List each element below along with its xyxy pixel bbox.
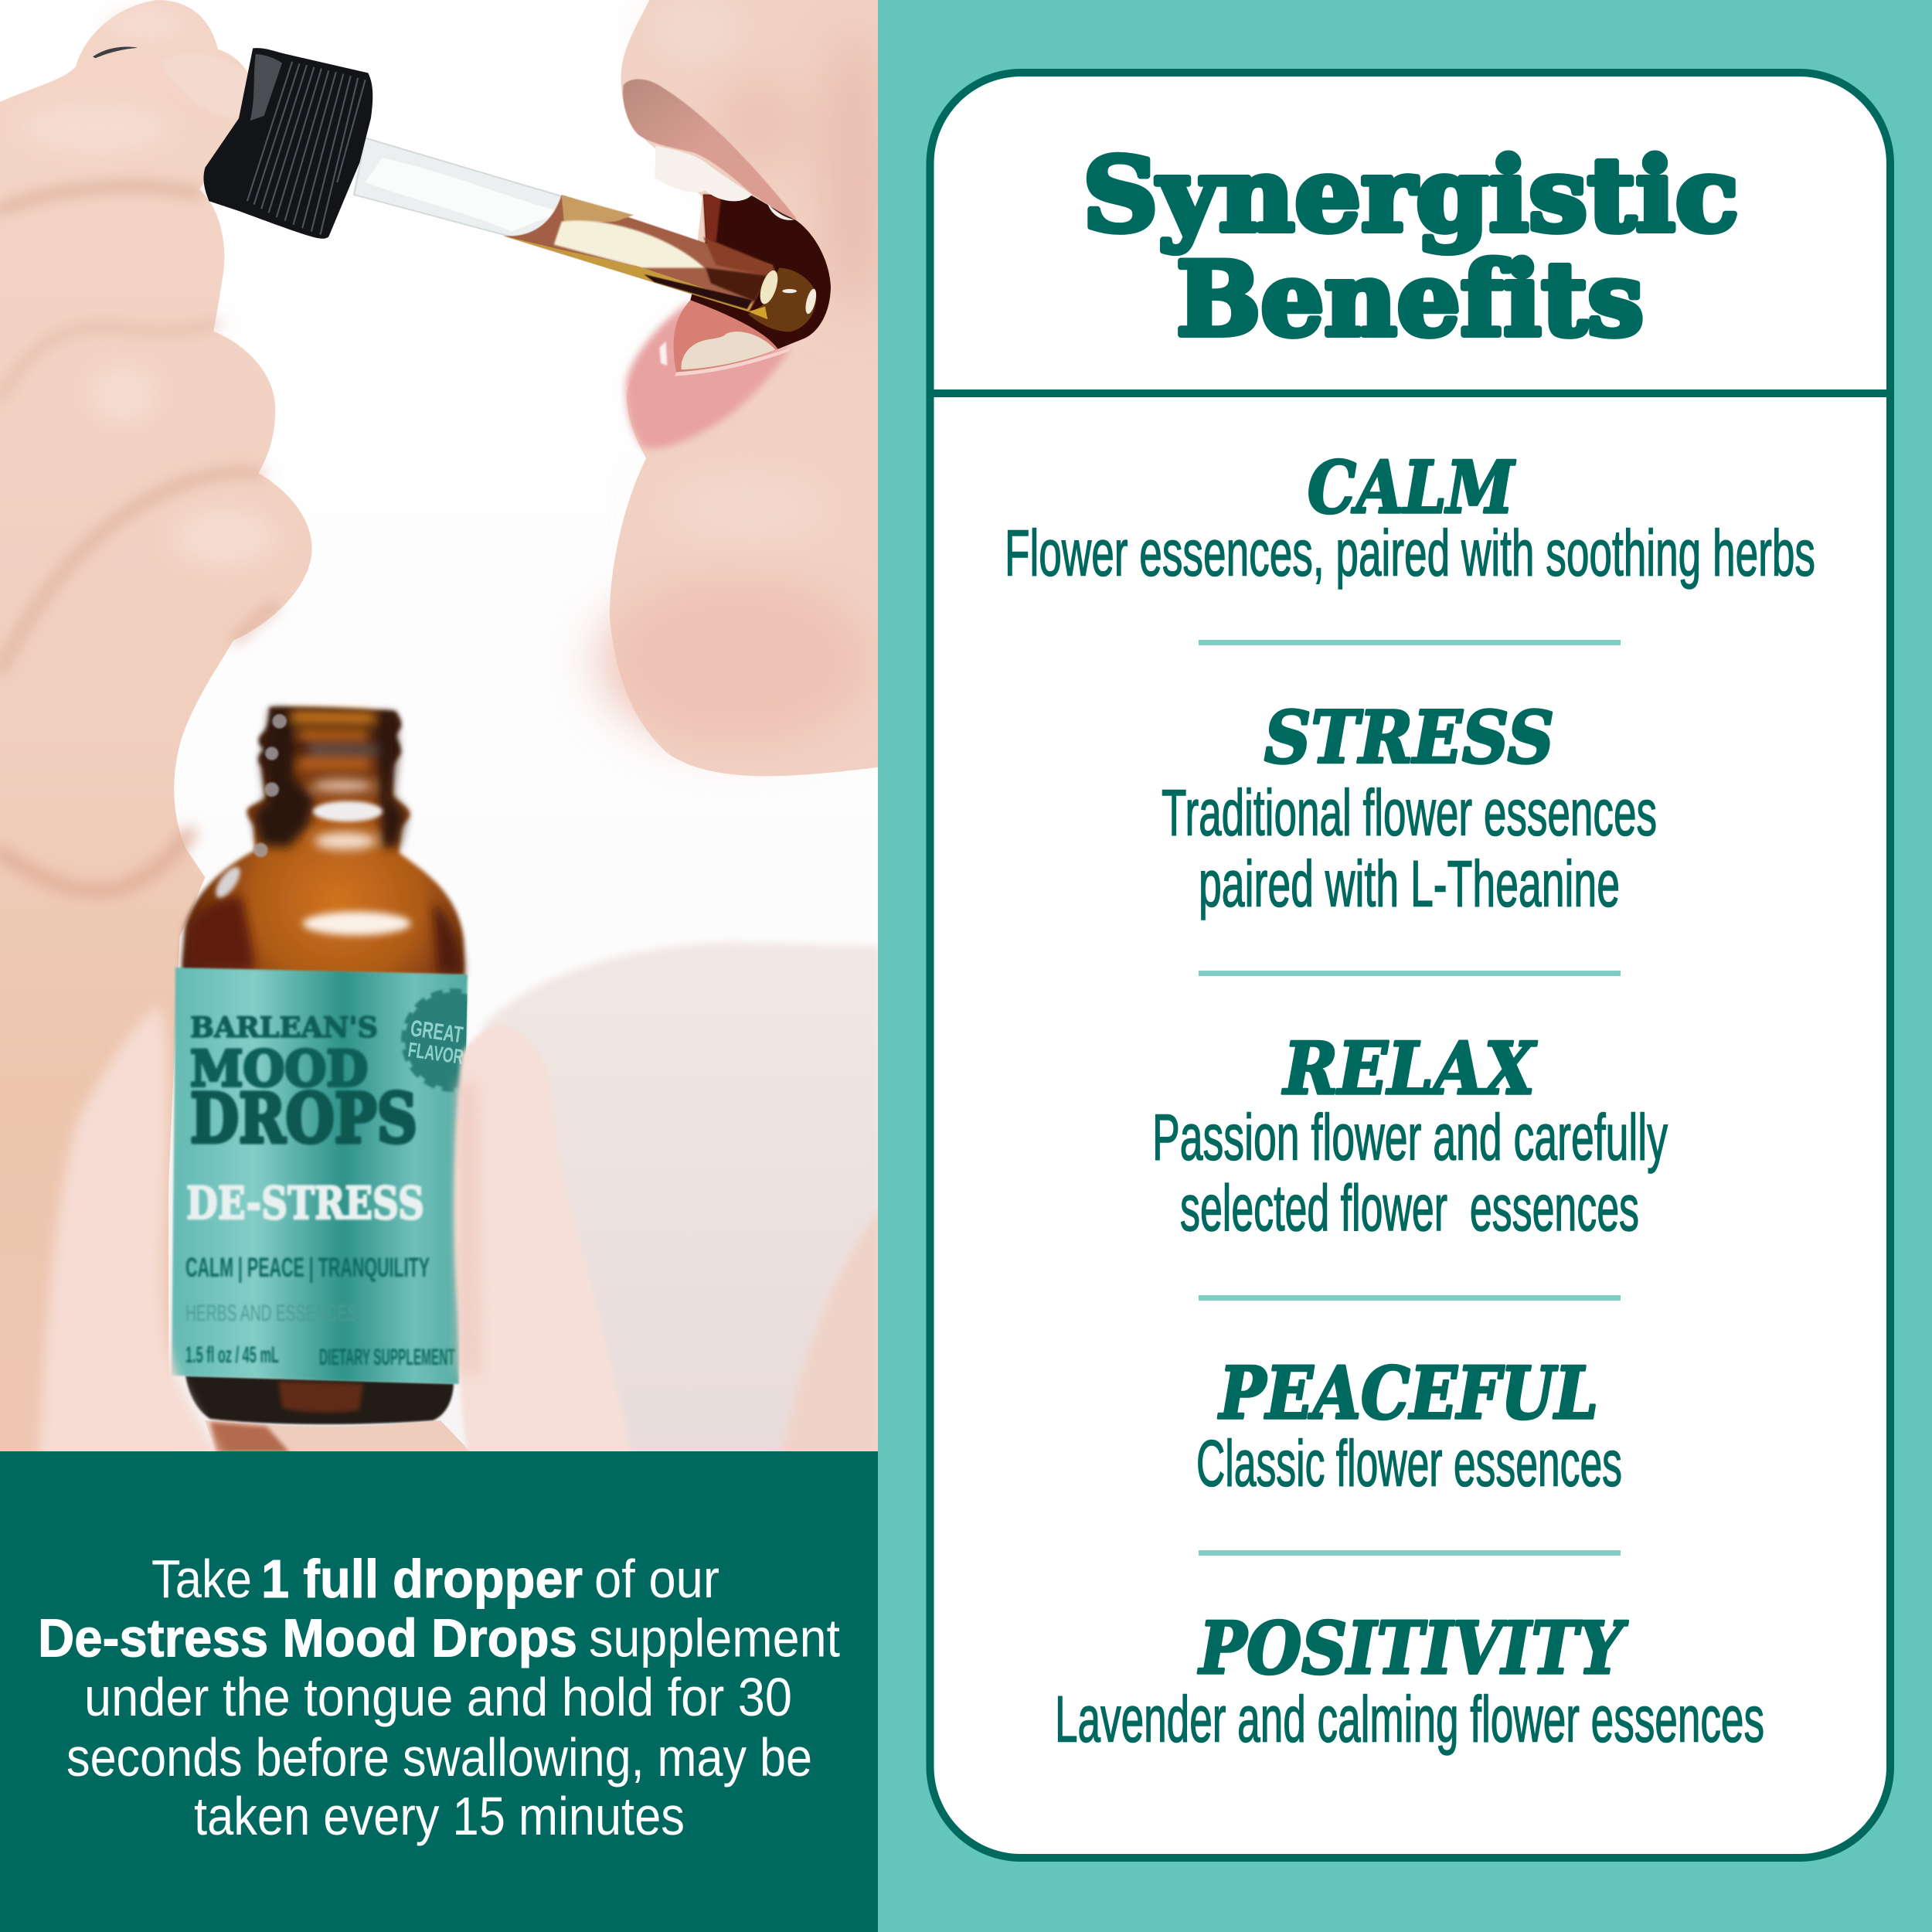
benefit: peaceful: Classic flower essences <box>1196 1427 1622 1499</box>
label text: MOOD <box>190 1040 368 1098</box>
benefit: stress: paired with L-Theanine <box>1199 847 1620 920</box>
instructions panel <box>0 1451 878 1932</box>
mouth details <box>623 79 831 448</box>
ribbed black cap <box>203 48 372 239</box>
benefit: positivity <box>1055 1606 1764 1756</box>
highlights on knuckles and nail <box>22 10 275 566</box>
instruction text: of our <box>594 1549 719 1609</box>
benefits card <box>930 73 1890 1858</box>
benefit: relax: RELAX <box>1281 1026 1537 1111</box>
lower teeth <box>681 332 775 369</box>
benefit: peaceful: PEACEFUL <box>1217 1351 1598 1435</box>
blurred shoulder <box>483 942 883 1459</box>
dropper pipette and cap <box>203 48 818 332</box>
upper teeth <box>655 145 752 201</box>
photo: person taking dropper of drops, hand holding bottle <box>0 0 885 1461</box>
instruction text: supplement <box>589 1607 840 1668</box>
base of bottle and gap below <box>185 1376 471 1453</box>
clear glass tube <box>354 138 596 257</box>
label text: CALM | PEACE | TRANQUILITY <box>185 1253 430 1283</box>
label text: DROPS <box>190 1078 417 1158</box>
benefit: stress <box>1162 696 1657 920</box>
benefit: calm: CALM <box>1308 445 1516 529</box>
right finger <box>454 1026 632 1461</box>
benefit: calm <box>1005 445 1815 589</box>
benefit: positivity: POSITIVITY <box>1197 1606 1628 1690</box>
hand holding the dropper <box>0 0 312 1454</box>
flavor badge: FLAVOR <box>406 1038 465 1069</box>
amber bottle of mood drops <box>172 707 501 1453</box>
fingers in front of the bottle <box>39 1007 632 1461</box>
benefit: peaceful <box>1196 1351 1622 1499</box>
instruction text: 1 full dropper <box>261 1549 583 1609</box>
label background <box>172 968 468 1384</box>
title: Synergistic <box>1083 135 1739 254</box>
benefit: stress: STRESS <box>1264 696 1554 779</box>
instruction text: De-stress Mood Drops <box>38 1607 577 1668</box>
flavor badge <box>405 992 501 1088</box>
label text: 1.5 fl oz / 45 mL <box>185 1342 279 1368</box>
instruction text: under the tongue and hold for 30 <box>84 1667 792 1727</box>
label text: DIETARY SUPPLEMENT <box>319 1345 455 1370</box>
label text <box>185 1012 455 1370</box>
benefit: relax: selected flower essences <box>1180 1172 1639 1244</box>
lower lip <box>626 300 791 448</box>
amber glass <box>182 707 465 976</box>
benefit: relax <box>1152 1026 1668 1244</box>
instruction text: seconds before swallowing, may be <box>66 1727 812 1787</box>
label text: DE-STRESS <box>186 1177 424 1230</box>
oil in the pipette <box>503 195 818 332</box>
flavor badge: GREAT <box>409 1015 464 1048</box>
title <box>1083 135 1739 359</box>
instruction text: taken every 15 minutes <box>194 1786 685 1846</box>
benefit: stress: Traditional flower essences <box>1162 776 1657 849</box>
left finger <box>39 1007 223 1461</box>
neck shading <box>185 711 462 974</box>
face profile with mouth <box>601 0 885 776</box>
label text: BARLEAN'S <box>190 1012 378 1044</box>
title: Benefits <box>1176 240 1644 359</box>
face skin <box>601 0 885 776</box>
label text: HERBS AND ESSENCES <box>185 1301 357 1326</box>
instruction text: Take <box>151 1549 252 1609</box>
finger creases and shading <box>0 186 275 891</box>
pipette tip <box>748 268 816 332</box>
instruction text <box>38 1549 840 1846</box>
mouth interior <box>690 195 831 349</box>
upper lip <box>623 79 798 219</box>
right teal background panel <box>878 0 1932 1932</box>
